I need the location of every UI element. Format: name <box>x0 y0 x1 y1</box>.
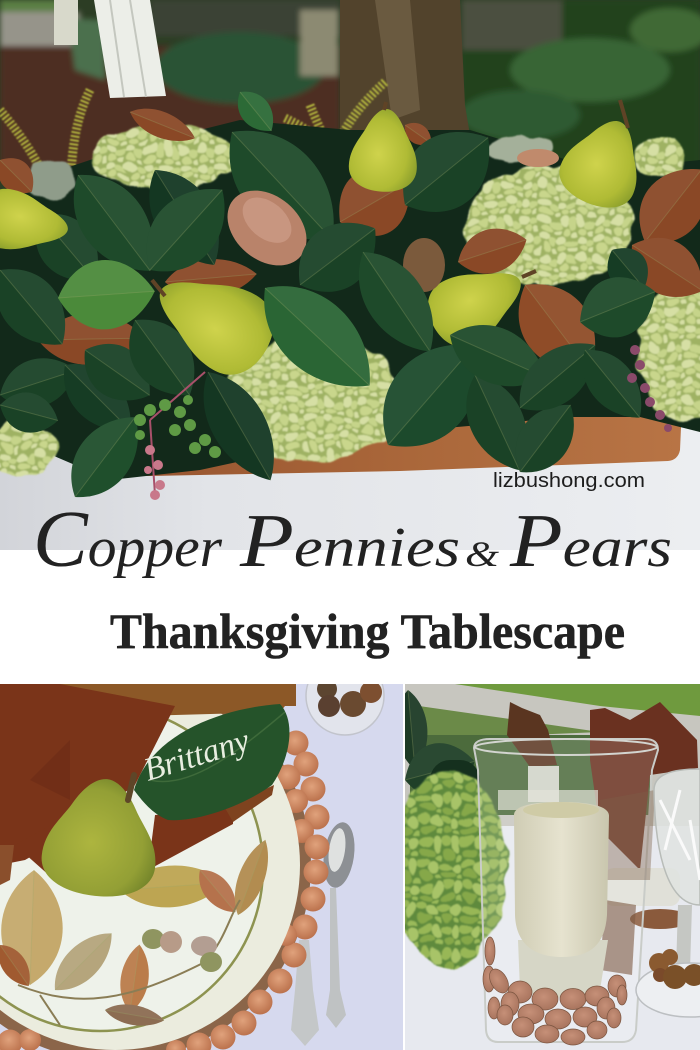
pokeberry cluster right <box>627 345 672 432</box>
script title: & <box>465 534 499 574</box>
pear: left edge <box>0 188 68 250</box>
garden background <box>0 0 700 200</box>
white embossed plate <box>0 680 300 1050</box>
lawn and road <box>405 684 700 826</box>
script title: Copper <box>33 496 222 584</box>
goldenrod sprays <box>0 78 388 166</box>
script title: Pennies <box>239 499 460 583</box>
magnolia leaves <box>405 690 480 790</box>
panel: place setting photo <box>0 657 403 1050</box>
magnolia green leaves, front layer <box>58 222 656 472</box>
subtitle: Thanksgiving Tablescape <box>110 603 625 659</box>
glass hurricane vase <box>474 739 658 1042</box>
handwritten name: Brittany <box>140 723 254 789</box>
pear: upper right <box>559 121 636 208</box>
magnolia green leaves, back layer <box>0 83 659 513</box>
copper backing ring <box>0 714 311 1050</box>
copper trough planter <box>146 417 681 476</box>
script title <box>33 496 672 584</box>
pear: top <box>348 109 417 192</box>
website credit: lizbushong.com <box>493 470 645 492</box>
green hydrangea <box>392 770 508 966</box>
table cloth <box>0 428 700 550</box>
pear: right <box>428 273 521 345</box>
hydrangea blooms <box>0 123 700 476</box>
panel: candle photo <box>392 684 700 1050</box>
magnolia seed pod large <box>228 190 306 266</box>
spoon <box>324 822 354 1028</box>
crystal wine glass <box>636 769 700 1017</box>
magnolia place card leaf <box>134 704 289 820</box>
knife handle <box>291 940 319 1046</box>
background napkins <box>507 702 698 870</box>
script title: Pears <box>509 499 672 583</box>
green pear with stem <box>42 772 156 896</box>
copper pennies on vase <box>483 937 627 1045</box>
white title band <box>0 550 700 684</box>
pear: centre <box>160 282 272 375</box>
magnolia brown leaves <box>0 100 700 366</box>
autumn leaf dinner plate <box>0 705 277 1031</box>
copper penny charger <box>0 730 330 1050</box>
panel: centerpiece photo <box>0 0 700 550</box>
pokeberry cluster left <box>134 372 221 500</box>
lavender tablecloth <box>0 684 403 1050</box>
pear stems <box>152 100 628 296</box>
glass dish with acorns <box>305 684 385 736</box>
background plate and pennies <box>608 868 680 929</box>
dark foliage mass <box>0 120 700 480</box>
white table <box>405 826 700 1050</box>
magnolia seed pods small <box>403 149 559 292</box>
rust napkin <box>0 684 296 885</box>
pillar candle <box>514 802 609 998</box>
